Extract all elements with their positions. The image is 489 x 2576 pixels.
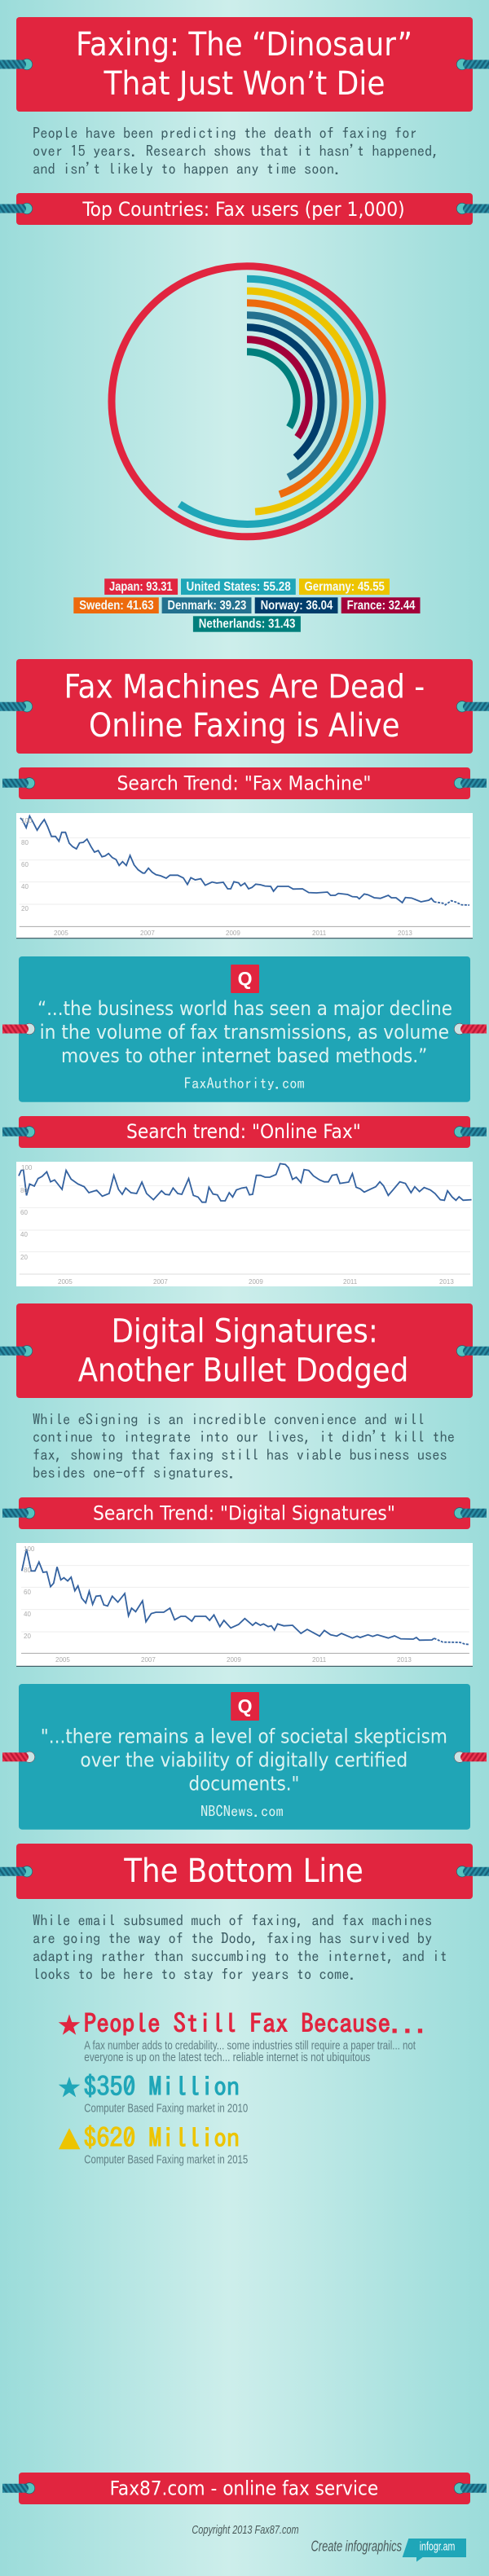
eSigning paragraph: besides one-off signatures. bbox=[33, 1466, 236, 1481]
line chart: digital signatures search trend: 80 bbox=[24, 1567, 31, 1574]
eSigning paragraph: While eSigning is an incredible convenience and will bbox=[33, 1413, 425, 1427]
stat: 620 million: $620 Million bbox=[84, 2124, 240, 2151]
line chart: digital signatures search trend: 2009 bbox=[227, 1656, 241, 1664]
line chart: fax machine search trend: 60 bbox=[21, 861, 29, 868]
line chart: fax machine search trend: 40 bbox=[21, 883, 29, 890]
infogram credit: infogr.am bbox=[420, 2540, 455, 2554]
heading: top countries bbox=[0, 193, 489, 225]
infogram credit bbox=[311, 2539, 466, 2561]
line chart: fax machine search trend: 2005 bbox=[54, 930, 68, 937]
conclusion paragraph: looks to be here to stay for years to come. bbox=[33, 1967, 357, 1982]
section banner: fax machines are dead bbox=[0, 659, 489, 754]
icon: red star bbox=[59, 2014, 80, 2035]
line chart: online fax search trend: 2011 bbox=[343, 1278, 358, 1286]
heading: top countries: Top Countries: Fax users (per 1,000) bbox=[82, 198, 405, 221]
title banner bbox=[0, 17, 489, 112]
chart legend: France: 32.44 bbox=[347, 599, 415, 613]
line chart: fax machine search trend: 80 bbox=[21, 839, 29, 846]
section banner: digital signatures: Another Bullet Dodged bbox=[78, 1352, 408, 1389]
line chart: digital signatures search trend: 2013 bbox=[397, 1656, 412, 1664]
line chart: online fax search trend: 60 bbox=[20, 1209, 28, 1216]
stat: 620 million: Computer Based Faxing market in 2015 bbox=[84, 2153, 248, 2167]
intro paragraph: over 15 years. Research shows that it hasn't happened, bbox=[33, 143, 440, 159]
heading: search trend online fax bbox=[2, 1116, 487, 1148]
line chart: online fax search trend: 80 bbox=[20, 1187, 28, 1194]
heading: search trend digital signatures: Search Trend: "Digital Signatures" bbox=[93, 1502, 395, 1525]
title banner: Faxing: The “Dinosaur” bbox=[76, 26, 412, 64]
quote panel: NBCNews: "...there remains a level of societal skepticism bbox=[41, 1725, 447, 1747]
quote panel: FaxAuthority: in the volume of fax transmissions, as volume bbox=[40, 1021, 449, 1044]
icon: quote Q bbox=[231, 965, 259, 993]
line chart: online fax search trend bbox=[16, 1162, 473, 1286]
line chart: digital signatures search trend: 100 bbox=[24, 1545, 35, 1553]
line chart: fax machine search trend: 2013 bbox=[398, 930, 412, 937]
line chart: online fax search trend: 100 bbox=[21, 1164, 33, 1172]
line chart: online fax search trend: 2013 bbox=[439, 1278, 454, 1286]
line chart: online fax search trend: 2009 bbox=[249, 1278, 263, 1286]
line chart: digital signatures search trend bbox=[16, 1543, 473, 1667]
intro paragraph: People have been predicting the death of faxing for bbox=[33, 126, 417, 141]
eSigning paragraph bbox=[33, 1413, 455, 1481]
stat: 350 million: $350 Million bbox=[84, 2073, 240, 2099]
eSigning paragraph: fax, showing that faxing still has viable business uses bbox=[33, 1448, 447, 1463]
line chart: fax machine search trend bbox=[16, 813, 473, 939]
conclusion paragraph: are going the way of the Dodo, faxing has survived by bbox=[33, 1932, 432, 1946]
line chart: digital signatures search trend: 2005 bbox=[55, 1656, 70, 1664]
stat: people still fax because: everyone is up on the latest tech... reliable internet is not ubiquitous bbox=[84, 2051, 370, 2064]
title banner: That Just Won’t Die bbox=[103, 65, 385, 103]
heading: search trend fax machine bbox=[2, 767, 487, 799]
eSigning paragraph: continue to integrate into our lives, it didn't kill the bbox=[33, 1430, 455, 1445]
chart legend: Netherlands: 31.43 bbox=[199, 618, 295, 631]
heading: search trend online fax: Search trend: "Online Fax" bbox=[126, 1120, 361, 1143]
stat: 350 million bbox=[59, 2073, 248, 2116]
chart legend: Japan: 93.31 bbox=[109, 580, 173, 594]
quote panel: NBCNews: documents." bbox=[189, 1772, 299, 1795]
icon: yellow triangle bbox=[59, 2128, 80, 2149]
line chart: digital signatures search trend: 40 bbox=[24, 1611, 31, 1618]
line chart: fax machine search trend: 20 bbox=[21, 905, 29, 912]
quote panel: FaxAuthority: “...the business world has seen a major decline bbox=[37, 997, 452, 1020]
intro paragraph bbox=[33, 126, 440, 177]
chart legend: Sweden: 41.63 bbox=[79, 599, 154, 613]
section banner: digital signatures bbox=[0, 1303, 489, 1398]
radial bar chart: fax users per country bbox=[112, 266, 382, 537]
stat: people still fax because bbox=[59, 2010, 429, 2064]
icon: quote Q bbox=[231, 1692, 259, 1721]
line chart: digital signatures search trend: 2011 bbox=[312, 1656, 327, 1664]
section banner: digital signatures: Digital Signatures: bbox=[112, 1313, 378, 1351]
copyright: Copyright 2013 Fax87.com bbox=[192, 2523, 299, 2537]
icon: quote Q: Q bbox=[238, 968, 253, 989]
line chart: online fax search trend: 40 bbox=[20, 1231, 28, 1238]
stat: people still fax because: People Still Fax Because... bbox=[84, 2010, 429, 2036]
line chart: fax machine search trend: 100 bbox=[21, 817, 33, 824]
quote panel: FaxAuthority: FaxAuthority.com bbox=[184, 1077, 305, 1092]
chart legend: Denmark: 39.23 bbox=[168, 599, 246, 613]
conclusion paragraph: While email subsumed much of faxing, and fax machines bbox=[33, 1914, 432, 1928]
conclusion paragraph bbox=[33, 1914, 447, 1982]
line chart: online fax search trend: 2005 bbox=[58, 1278, 73, 1286]
quote panel: NBCNews: over the viability of digitally certified bbox=[80, 1748, 408, 1771]
footer banner: fax87 bbox=[2, 2473, 487, 2504]
section banner: the bottom line: The Bottom Line bbox=[123, 1853, 363, 1890]
line chart: digital signatures search trend: 60 bbox=[24, 1589, 31, 1596]
chart legend: Germany: 45.55 bbox=[305, 580, 385, 594]
line chart: fax machine search trend: 2011 bbox=[312, 930, 327, 937]
icon: quote Q: Q bbox=[238, 1695, 253, 1717]
heading: search trend digital signatures bbox=[2, 1497, 487, 1529]
line chart: fax machine search trend: 2009 bbox=[226, 930, 240, 937]
section banner: the bottom line bbox=[0, 1844, 489, 1899]
line chart: fax machine search trend: 2007 bbox=[140, 930, 155, 937]
quote panel: FaxAuthority bbox=[2, 956, 487, 1102]
line chart: online fax search trend: 2007 bbox=[153, 1278, 168, 1286]
stat: 350 million: Computer Based Faxing market in 2010 bbox=[84, 2102, 248, 2116]
stat: 620 million bbox=[59, 2124, 248, 2167]
chart legend bbox=[73, 578, 421, 632]
quote panel: NBCNews: NBCNews.com bbox=[200, 1805, 284, 1819]
intro paragraph: and isn't likely to happen any time soon. bbox=[33, 161, 341, 177]
heading: search trend fax machine: Search Trend: "Fax Machine" bbox=[117, 772, 371, 795]
line chart: digital signatures search trend: 20 bbox=[24, 1633, 31, 1640]
footer banner: fax87: Fax87.com - online fax service bbox=[110, 2477, 378, 2500]
quote panel: FaxAuthority: moves to other internet based methods.” bbox=[61, 1044, 427, 1067]
section banner: fax machines are dead: Fax Machines Are Dead - bbox=[64, 669, 425, 706]
infogram credit: Create infographics bbox=[311, 2539, 402, 2555]
icon: teal star bbox=[59, 2077, 80, 2097]
chart legend: Norway: 36.04 bbox=[261, 599, 333, 613]
quote panel: NBCNews bbox=[2, 1684, 487, 1830]
line chart: online fax search trend: 20 bbox=[20, 1254, 28, 1261]
conclusion paragraph: adapting rather than succumbing to the internet, and it bbox=[33, 1950, 447, 1964]
section banner: fax machines are dead: Online Faxing is Alive bbox=[89, 707, 400, 745]
line chart: digital signatures search trend: 2007 bbox=[141, 1656, 156, 1664]
chart legend: United States: 55.28 bbox=[186, 580, 291, 594]
